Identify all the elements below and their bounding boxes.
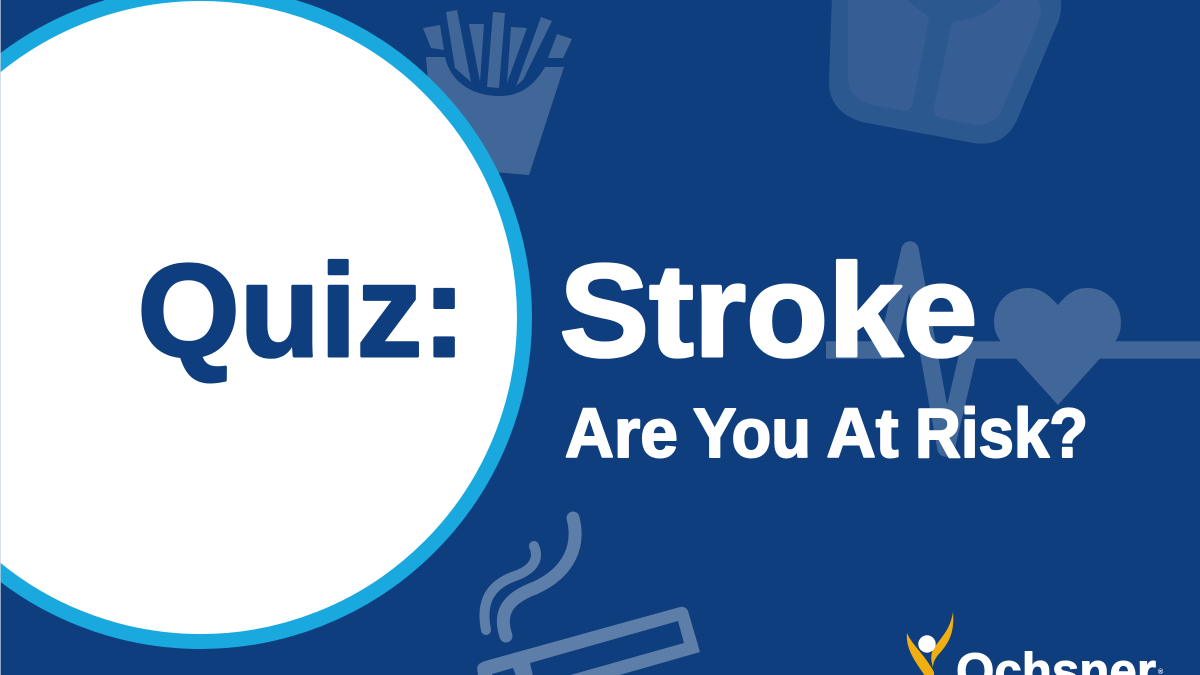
left edge line — [0, 0, 1, 675]
subheading: Are You At Risk: At — [826, 394, 898, 472]
subheading: Are You At Risk: Are — [565, 394, 678, 472]
subheading: Are You At Risk — [565, 394, 1088, 472]
icon: french fries — [423, 10, 572, 175]
panel: white circle with blue ring — [0, 0, 524, 642]
heading: Stroke: Stroke — [560, 237, 978, 384]
logo: Ochsner — [907, 612, 1164, 675]
subheading: Are You At Risk: You — [693, 394, 811, 472]
icon: bathroom scale — [829, 0, 1061, 144]
subheading: Are You At Risk: Risk? — [915, 394, 1088, 472]
heading: Quiz: Quiz: — [138, 237, 466, 384]
icon: heartbeat line and heart — [826, 250, 1200, 448]
icon: cigarette with smoke — [477, 518, 700, 675]
